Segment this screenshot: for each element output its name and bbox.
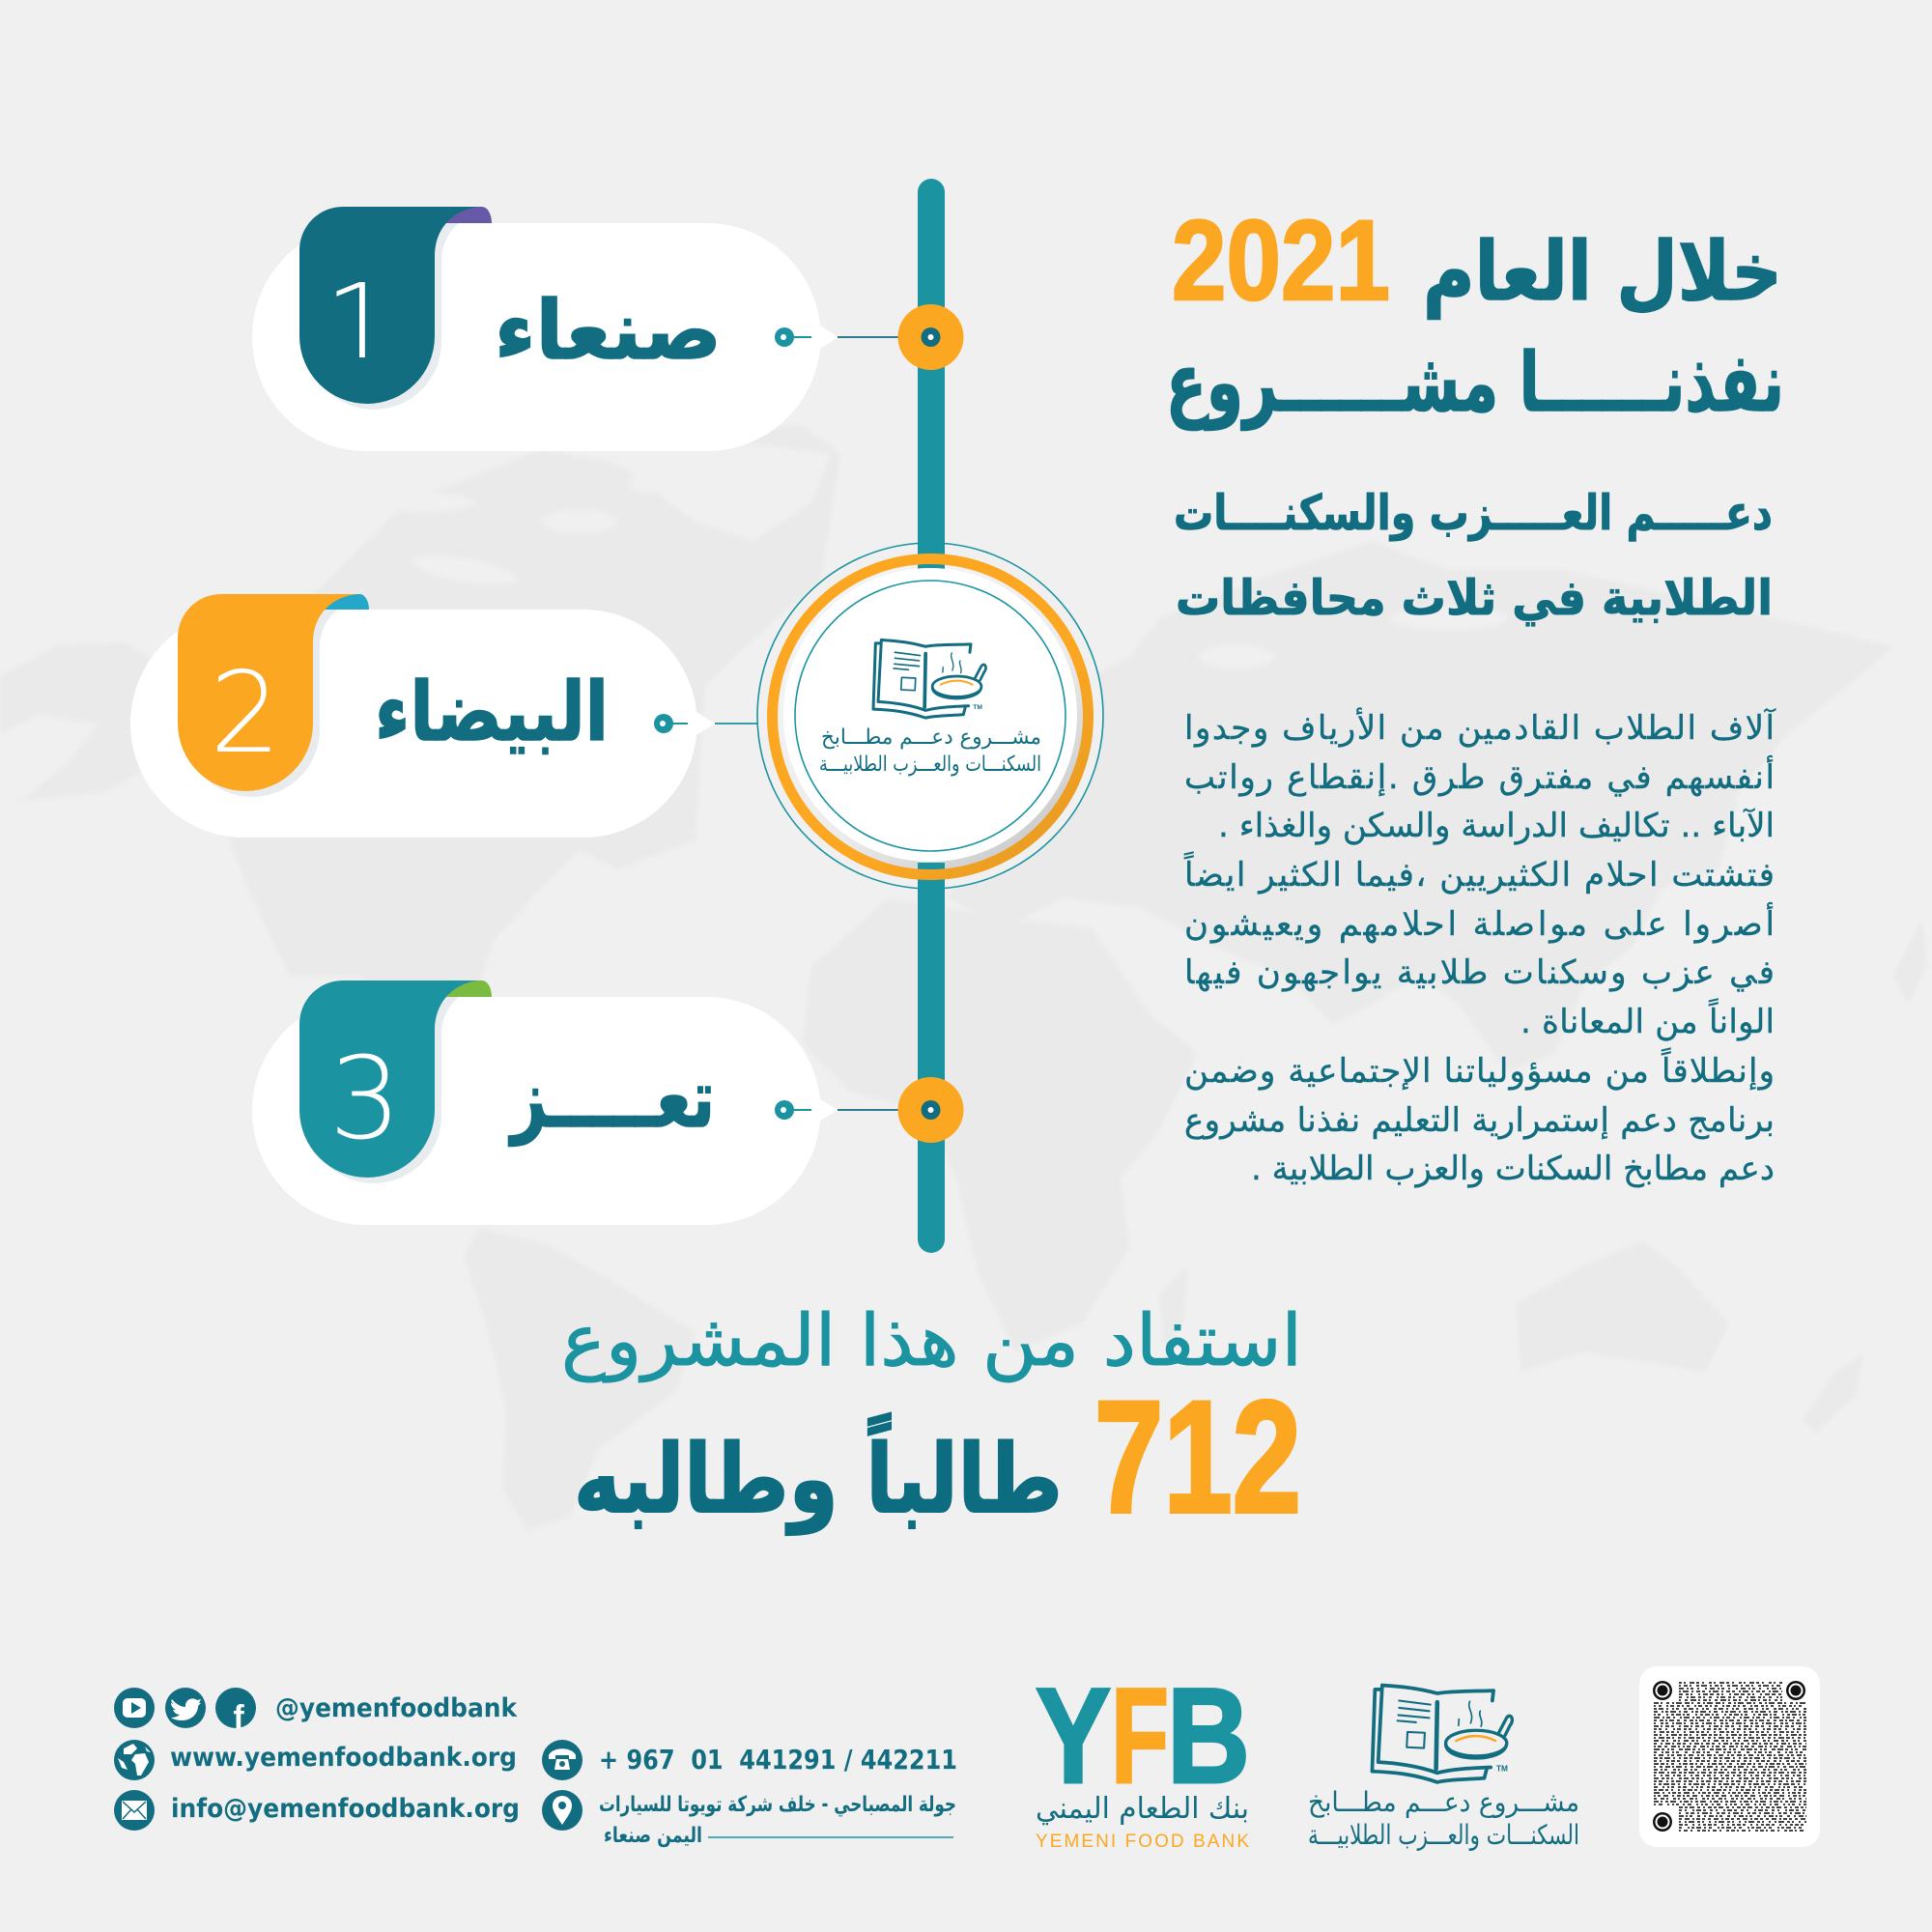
url: www.yemenfoodbank.org [170, 1743, 517, 1773]
pill [130, 610, 715, 838]
name: البيضاء [375, 665, 609, 759]
connector dot [775, 1100, 923, 1120]
pill [252, 997, 838, 1225]
YFB logo [1036, 1660, 1250, 1852]
address line 1: جولة المصباحي - خلف شركة تويوتا للسيارات [599, 1793, 956, 1817]
body paragraph: الواناً من المعاناة . [1520, 998, 1775, 1041]
tab [299, 980, 480, 1178]
title [1166, 197, 1784, 431]
title: خلال العام [1423, 224, 1782, 320]
icon: facebook: f [233, 1699, 244, 1736]
connector dot [775, 327, 923, 347]
shadow [306, 213, 487, 410]
handle: @yemenfoodbank [275, 1693, 518, 1723]
step 3: Taiz [252, 980, 964, 1225]
tab [178, 594, 358, 791]
emblem text [819, 725, 1041, 777]
address: info@yemenfoodbank.org [171, 1794, 520, 1824]
logo text: مشـــروع دعـــم مطـــابخ [1308, 1786, 1579, 1818]
subtitle: الطلابية في ثلاث محافظات [1176, 570, 1773, 626]
name: صنعاء [495, 283, 722, 378]
emblem logo [873, 640, 985, 718]
logo text: السكنـــات والعـــزب الطلابيـــة [1308, 1819, 1579, 1851]
number: 3 [328, 1032, 402, 1165]
corner accent [315, 594, 369, 618]
body paragraph: فتشتت احلام الكثيريين ،فيما الكثير ايضاً [1183, 851, 1775, 895]
body paragraph: برنامج دعم إستمرارية التعليم نفذنا مشروع [1184, 1101, 1775, 1140]
name: تعـــــز [508, 1051, 715, 1147]
connector dot [654, 714, 785, 733]
icon: globe [114, 1740, 155, 1780]
beneficiaries heading: استفاد من هذا المشروع [561, 1299, 1302, 1382]
YFB logo: Y [1036, 1660, 1111, 1811]
body paragraph: الآباء .. تكاليف الدراسة والسكن والغذاء . [1218, 807, 1775, 845]
body paragraph: وإنطلاقاً من مسؤولياتنا الإجتماعية وضمن [1184, 1047, 1775, 1091]
footer: address [542, 1790, 956, 1848]
footer: social row [114, 1688, 518, 1736]
YFB logo: YEMENI FOOD BANK [1036, 1832, 1249, 1852]
emblem text: مشـــروع دعـــم مطـــابخ [821, 725, 1041, 750]
number: 2 [210, 648, 281, 779]
center emblem [757, 536, 1103, 898]
footer: phone [542, 1740, 957, 1780]
footer: website [114, 1740, 517, 1780]
node [898, 1077, 964, 1143]
address line 2: اليمن صنعاء [604, 1824, 702, 1848]
body paragraph: أنفسهم في مفترق طرق .إنقطاع رواتب [1184, 755, 1775, 797]
beneficiaries count [574, 1368, 1301, 1546]
step 1: Sanaa [252, 207, 963, 451]
title: 2021 [1172, 197, 1390, 325]
world map silhouette [0, 425, 1927, 1531]
beneficiaries count: طالباً وطالبه [574, 1412, 1063, 1536]
body paragraph [1183, 707, 1776, 1188]
icon: mail [114, 1790, 155, 1831]
shadow [185, 600, 365, 797]
beneficiaries count: 712 [1094, 1368, 1301, 1546]
icon: phone [542, 1740, 582, 1780]
icon: twitter [165, 1688, 206, 1728]
icon: book and pan [1372, 1686, 1512, 1782]
pill [252, 223, 838, 451]
subtitle [1174, 485, 1773, 626]
tab [299, 207, 480, 404]
corner accent [437, 980, 492, 1006]
number: 1 [324, 259, 397, 392]
project logo [1308, 1686, 1579, 1851]
logo text [1308, 1786, 1579, 1851]
QR code [1639, 1666, 1820, 1847]
YFB logo: F [1111, 1660, 1169, 1811]
step 2: Al Bayda [130, 594, 785, 838]
subtitle: دعـــــم العـــــزب والسكنــــات [1174, 485, 1773, 542]
timeline bar [918, 179, 945, 1253]
YFB logo: بنك الطعام اليمني [1036, 1792, 1249, 1826]
icon: facebook [215, 1688, 256, 1736]
emblem text: السكنـــات والعـــزب الطلابيـــة [819, 753, 1041, 777]
icon: location pin [542, 1790, 582, 1831]
body paragraph: في عزب وسكنات طلابية يواجهون فيها [1184, 953, 1775, 992]
body paragraph: دعم مطابخ السكنات والعزب الطلابية . [1251, 1150, 1775, 1188]
body paragraph: آلاف الطلاب القادمين من الأرياف وجدوا [1184, 707, 1776, 748]
icon: youtube [114, 1688, 155, 1728]
footer: email [114, 1790, 520, 1831]
YFB logo: B [1167, 1660, 1250, 1811]
number: + 967 01 441291 / 442211 [599, 1744, 957, 1776]
corner accent [437, 207, 492, 232]
node [898, 304, 964, 370]
body paragraph: أصروا على مواصلة احلامهم ويعيشون [1184, 902, 1775, 944]
shadow [306, 986, 487, 1183]
